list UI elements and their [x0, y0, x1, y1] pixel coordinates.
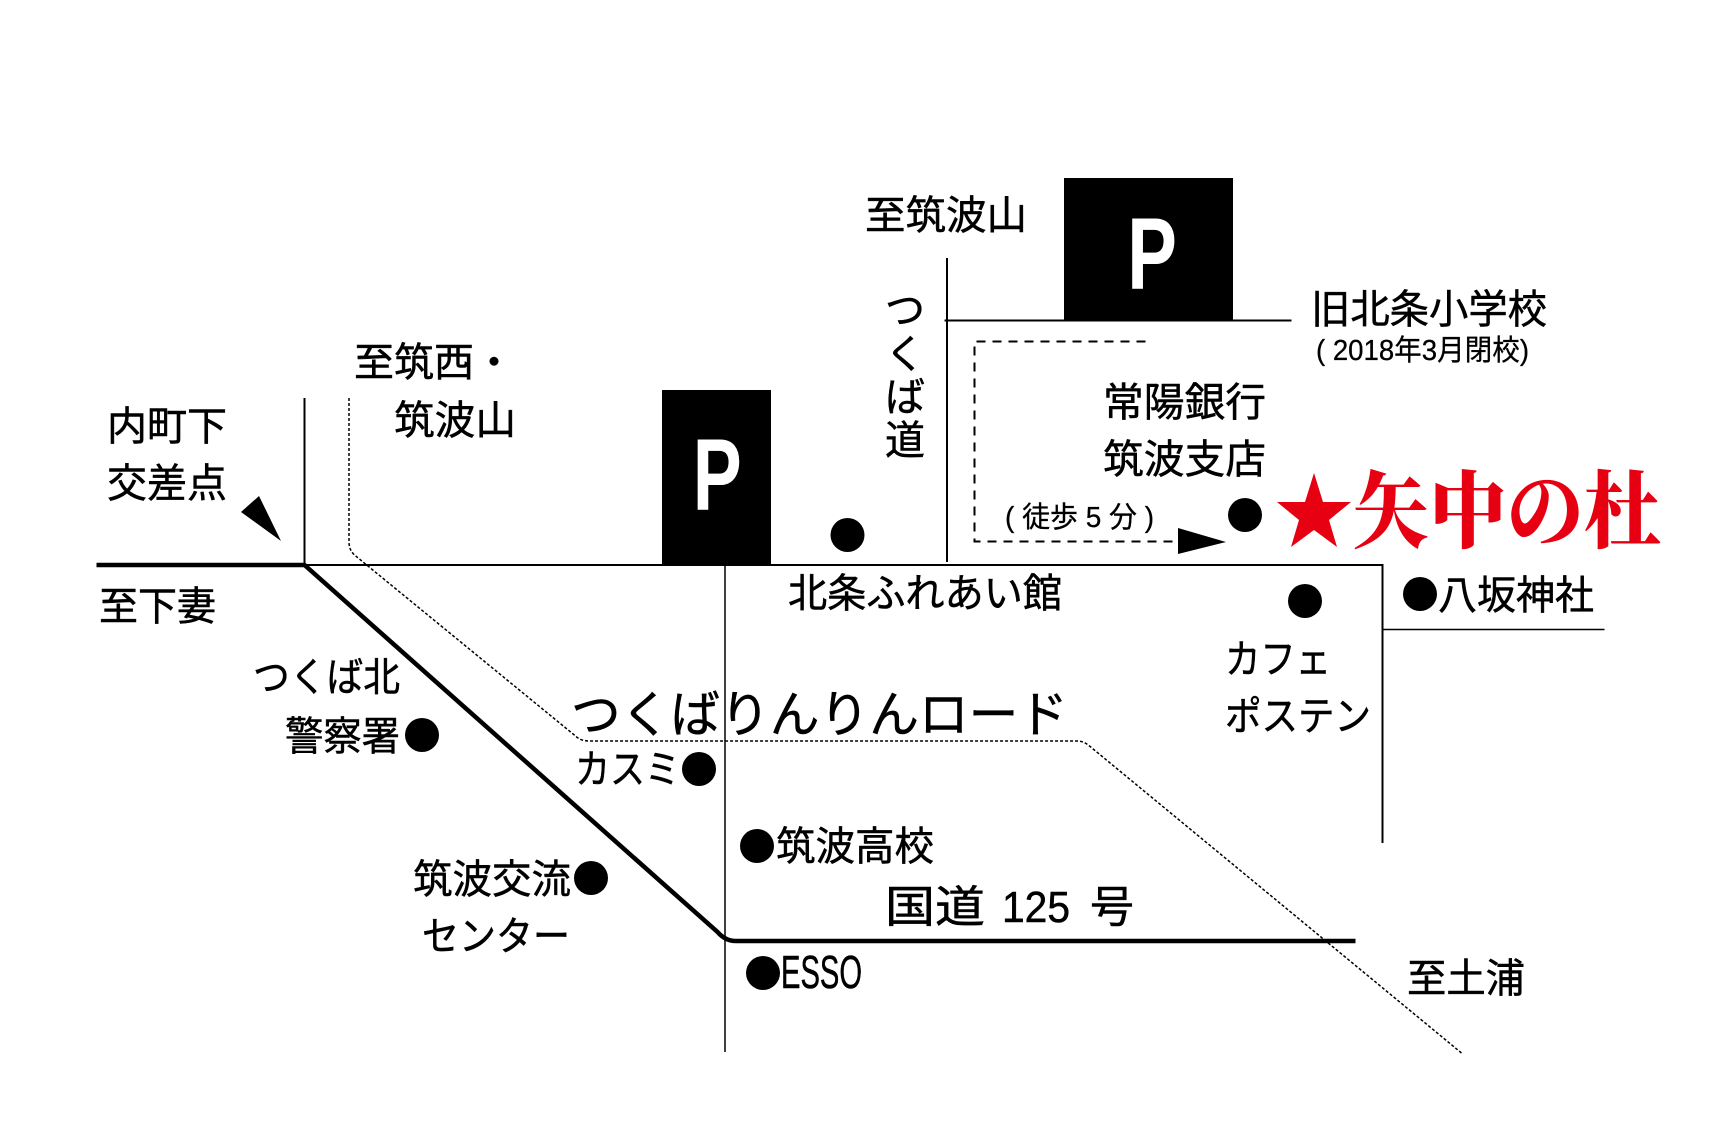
parking: north	[1064, 178, 1233, 320]
label: route 125: 国道	[885, 883, 985, 932]
label: Tsukuba road vertical: く	[885, 333, 925, 377]
label: Cafe: カフェ	[1225, 638, 1331, 682]
label: cycling road: つくばりんりんロード	[571, 687, 1068, 743]
label: route 125: 125	[1002, 883, 1070, 932]
label: police station: 警察署	[285, 715, 400, 759]
label: Yasaka shrine: 八坂神社	[1438, 574, 1594, 618]
icon: intersection pointer	[241, 496, 281, 541]
label: route 125	[885, 883, 1134, 932]
label: walk 5 minutes: ( 徒歩 5 分 )	[1005, 501, 1154, 534]
title: Yanaka no Mori: 矢中の杜	[1352, 467, 1661, 560]
icon: walking route arrow head	[1178, 528, 1226, 554]
parking: south	[662, 390, 771, 565]
label: Hojo Fureaikan: 北条ふれあい館	[788, 572, 1062, 616]
label: ESSO: ESSO	[781, 946, 862, 998]
label: Tsukuba high school: 筑波高校	[776, 825, 934, 869]
access map	[96, 178, 1661, 1053]
label: Kasumi: カスミ	[575, 748, 680, 792]
label: route 125: 号	[1090, 883, 1134, 932]
label: Tsukuba road vertical: 道	[885, 419, 925, 463]
label: to Shimotsuma: 至下妻	[99, 585, 216, 629]
label: Tsukuba road vertical: つ	[885, 289, 925, 333]
road: national route 125 thick	[96, 565, 1356, 941]
label: Tsukuba north line 1: つくば北	[253, 656, 400, 700]
parking: north: P	[1127, 196, 1177, 311]
road: left vertical	[304, 398, 306, 565]
label: Tsukuba exchange line 1: 筑波交流	[413, 858, 571, 902]
label: closed 2018: ( 2018年3月閉校)	[1316, 334, 1529, 367]
label: to Chikusei and Mt Tsukuba line 2: 筑波山	[394, 399, 516, 443]
label: to Chikusei and Mt Tsukuba line 1: 至筑西・	[354, 341, 514, 385]
label: Joyo bank: 常陽銀行	[1103, 381, 1266, 425]
road: hachisaka shrine side road	[1382, 628, 1604, 630]
label: former Hojo elementary school: 旧北条小学校	[1311, 288, 1547, 332]
label: Posten: ポステン	[1225, 695, 1371, 739]
parking: south: P	[693, 418, 742, 532]
road: top horizontal and right vertical	[304, 565, 1382, 843]
road network	[96, 258, 1604, 1053]
cycling road dotted line	[349, 398, 1462, 1053]
label: Tsukuba road vertical: ば	[885, 376, 925, 420]
walking route dashed line	[974, 342, 1182, 542]
road: former school horizontal	[944, 320, 1292, 322]
label: center: センター	[422, 915, 570, 959]
road: tsukuba michi vertical	[946, 258, 948, 562]
label: Tsukuba branch: 筑波支店	[1103, 438, 1266, 482]
road: centre vertical	[724, 565, 726, 1052]
label: Uchimachishita: 内町下	[107, 405, 227, 449]
location dots	[405, 498, 1437, 990]
icon: star	[1277, 473, 1351, 547]
label: to Tsuchiura: 至土浦	[1407, 957, 1525, 1001]
label: to Mt Tsukuba: 至筑波山	[865, 194, 1027, 238]
label: intersection: 交差点	[107, 462, 227, 506]
